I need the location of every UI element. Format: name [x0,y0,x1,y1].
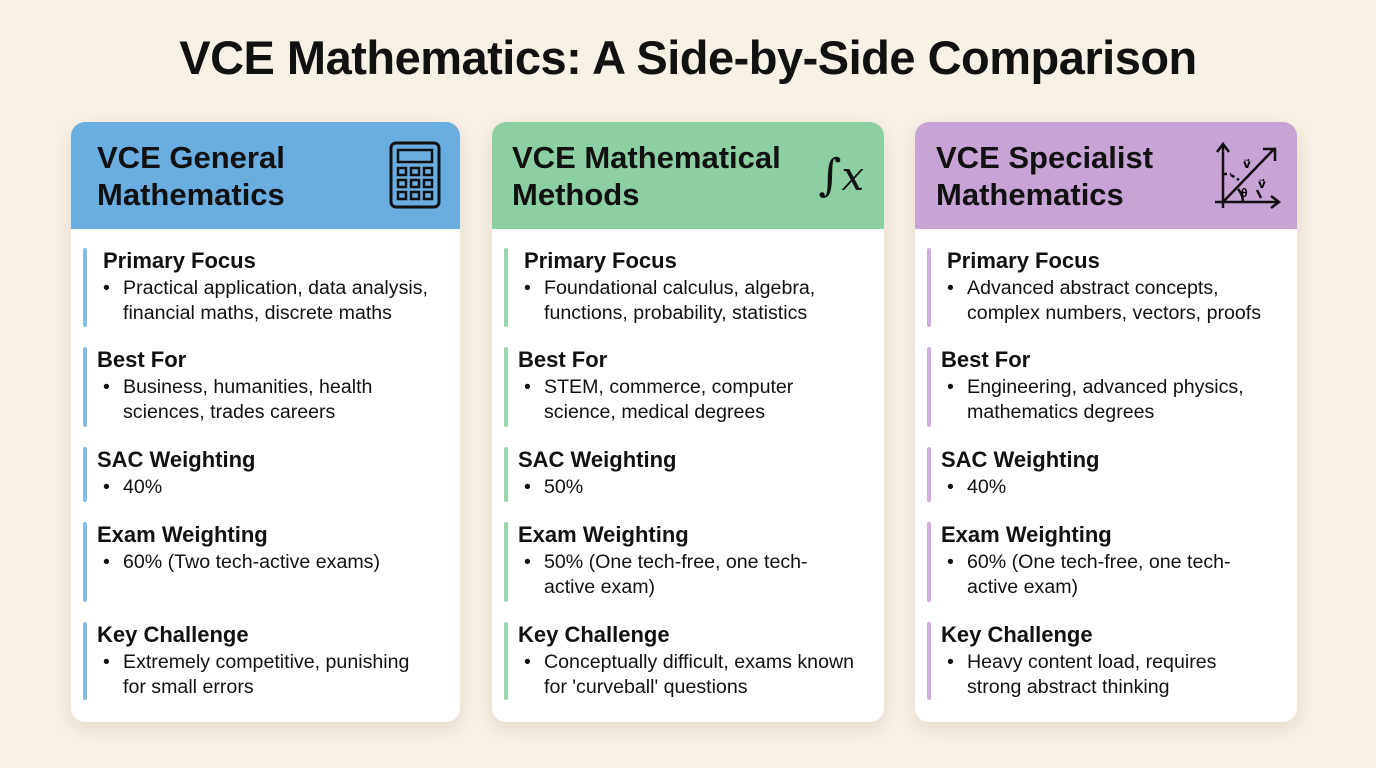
header: methods [492,122,884,229]
section: primary focus: Foundational calculus, algebra, functions, probability, statistics [544,277,815,324]
section: challenge: strong abstract thinking [967,676,1170,698]
title: VCE Mathematics: A Side-by-Side Comparison [179,31,1197,84]
section: exam [83,522,380,602]
section: challenge: Heavy content load, requires [967,651,1216,673]
section: primary focus: Primary Focus [103,248,256,273]
icon: vectors [1215,142,1281,209]
section: challenge: Conceptually difficult, exams known for 'curveball' questions [544,651,854,698]
section: exam: 50% (One tech-free, one tech-active exam) [544,551,808,598]
section: primary focus: Advanced abstract concepts, complex numbers, vectors, proofs [967,277,1261,324]
section: best for [927,347,1244,427]
panel: specialist [915,122,1297,722]
section: primary focus: Practical application, data analysis, financial maths, discrete maths [123,277,428,324]
section: challenge [927,622,1216,700]
section: sac: 50% [544,476,583,498]
section: exam: Exam Weighting [97,522,268,547]
icon: integral: ∫x [818,150,864,201]
section: best for: Business, humanities, health sciences, trades careers [123,376,372,423]
section: primary focus: Primary Focus [947,248,1100,273]
header: specialist: Mathematics [936,177,1124,212]
section: best for [83,347,372,427]
header: methods: VCE Mathematical [512,140,781,175]
section: challenge [504,622,854,700]
panel: methods [492,122,884,722]
section: best for: STEM, commerce, computer science, medical degrees [544,376,793,423]
header: general [71,122,460,229]
section: sac [504,447,676,502]
icon: vectors: θ [1241,186,1248,200]
panel: general [71,122,460,722]
section: primary focus [504,248,815,327]
section: sac [83,447,255,502]
section: challenge [83,622,409,700]
section: sac: 40% [123,476,162,498]
section: challenge: Key Challenge [97,622,249,647]
section: sac: SAC Weighting [941,447,1099,472]
section: exam: Exam Weighting [518,522,689,547]
section: exam [504,522,808,602]
section: sac: SAC Weighting [518,447,676,472]
header: general: Mathematics [97,177,285,212]
header: methods: Methods [512,177,639,212]
section: primary focus [83,248,428,327]
section: primary focus [927,248,1261,327]
section: challenge: Extremely competitive, punishing for small errors [123,651,409,698]
section: challenge: Key Challenge [518,622,670,647]
section: sac: 40% [967,476,1006,498]
section: exam: 60% (One tech-free, one tech-active exam) [967,551,1231,598]
icon: vectors: v⃗ [1258,177,1266,191]
header: general: VCE General [97,140,285,175]
section: exam: Exam Weighting [941,522,1112,547]
section: best for: Best For [518,347,607,372]
header: specialist [915,122,1297,229]
section: sac [927,447,1099,502]
section: best for: Best For [97,347,186,372]
section: primary focus: Primary Focus [524,248,677,273]
header: specialist: VCE Specialist [936,140,1153,175]
section: sac: SAC Weighting [97,447,255,472]
section: best for: Engineering, advanced physics, mathematics degrees [967,376,1244,423]
section: exam: 60% (Two tech-active exams) [123,551,380,573]
icon: calculator [390,142,440,208]
section: challenge: Key Challenge [941,622,1093,647]
section: exam [927,522,1231,602]
icon: vectors: v⃗ [1243,157,1251,171]
section: best for [504,347,793,427]
section: best for: Best For [941,347,1030,372]
